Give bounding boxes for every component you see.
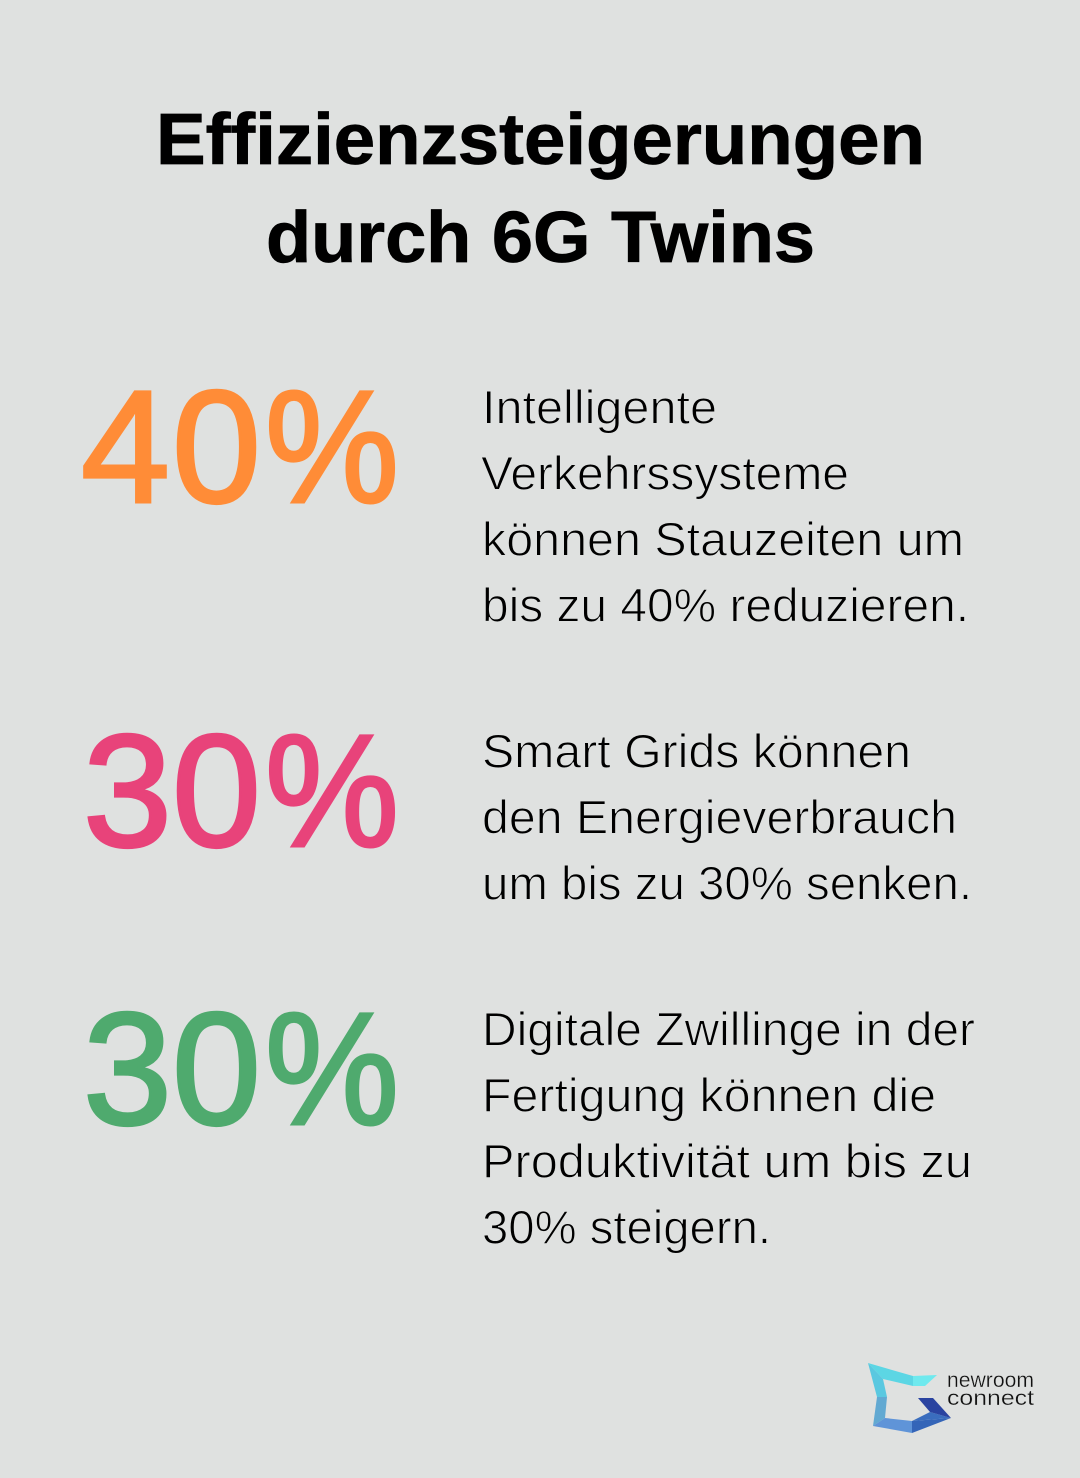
logo wordmark (947, 1369, 1034, 1410)
stat: 30% pink (83, 701, 399, 880)
stat: 30% green: 30 (83, 979, 261, 1158)
title: durch 6G Twins (266, 198, 815, 278)
stat: 30% green (83, 979, 399, 1158)
text: traffic systems: Verkehrssysteme (481, 446, 849, 500)
stat: 30% green: % (265, 979, 399, 1158)
icon: logo mark (868, 1363, 951, 1433)
stat: 30% pink: % (265, 701, 399, 880)
panel: manufacturing statistic (83, 979, 975, 1254)
text: digital twins: Produktivität um bis zu (482, 1134, 972, 1188)
text: smart grids: um bis zu 30% senken. (482, 856, 972, 910)
text: traffic systems: können Stauzeiten um (482, 512, 964, 566)
text: smart grids: den Energieverbrauch (482, 790, 957, 844)
title (156, 100, 925, 278)
title: Effizienzsteigerungen (156, 100, 925, 180)
stat: 30% pink: 30 (83, 701, 261, 880)
panel: smart grid statistic (83, 701, 972, 910)
text: digital twins: Digitale Zwillinge in der (482, 1002, 975, 1056)
text: digital twins: Fertigung können die (482, 1068, 936, 1122)
text: traffic systems: bis zu 40% reduzieren. (482, 578, 969, 632)
text: digital twins (482, 1002, 975, 1254)
text: smart grids: Smart Grids können (482, 724, 911, 778)
stat: 40%: % (265, 357, 399, 536)
logo wordmark: newroom (947, 1369, 1034, 1392)
logo wordmark: connect (947, 1387, 1034, 1410)
text: traffic systems: Intelligente (482, 380, 717, 434)
stat: 40%: 40 (81, 357, 261, 536)
text: digital twins: 30% steigern. (482, 1200, 771, 1254)
logo: newroom connect (868, 1363, 1034, 1433)
text: traffic systems (481, 380, 969, 632)
text: smart grids (482, 724, 972, 910)
panel: traffic statistic (81, 357, 969, 632)
stat: 40% (81, 357, 399, 536)
